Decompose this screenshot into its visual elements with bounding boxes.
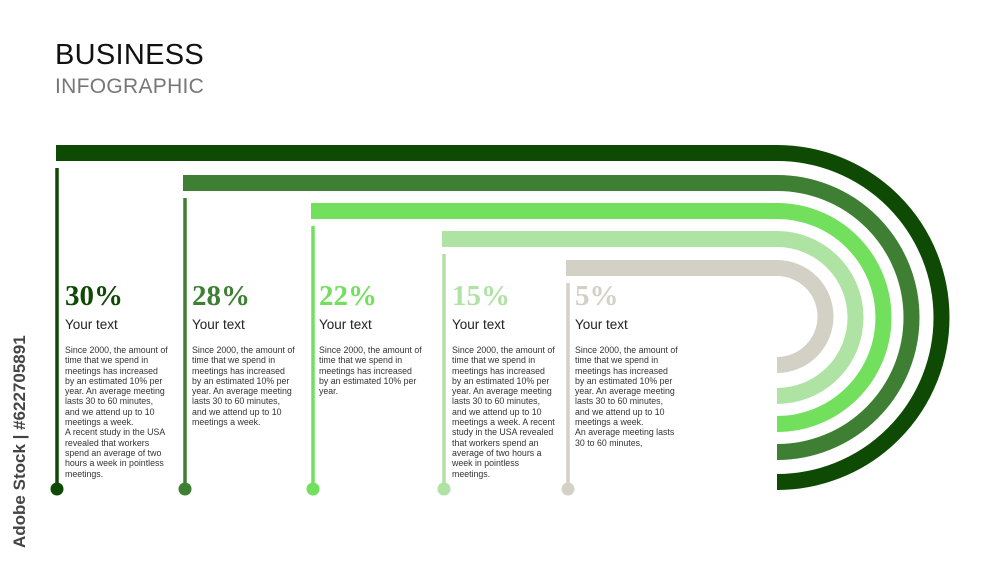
column 5: Your text <box>575 317 628 332</box>
column 2: 28% <box>192 280 250 312</box>
column 2: Since 2000, the amount of time that we spend in meetings has increased by an estimated 10% per year. An average meeting lasts 30 to 60 minutes, and we attend up to 10 meetings a week. <box>192 345 295 427</box>
watermark side text: Adobe Stock | #622705891 <box>10 335 29 548</box>
band 4 <box>442 239 856 396</box>
column 1: Since 2000, the amount of time that we spend in meetings has increased by an estimated 10% per year. An average meeting lasts 30 to 60 minutes, and we attend up to 10 meetings a week. <box>65 345 168 427</box>
band 3 <box>311 211 884 424</box>
band 5 <box>566 268 826 365</box>
column 3: Since 2000, the amount of time that we spend in meetings has increased by an estimated 10% per year. <box>319 345 422 396</box>
column 2: Your text <box>192 317 245 332</box>
column 3 <box>319 280 422 396</box>
title: INFOGRAPHIC <box>55 75 204 98</box>
column 1 <box>65 280 168 479</box>
column 5 <box>575 280 678 448</box>
column 4: 15% <box>452 280 510 312</box>
title <box>55 39 204 98</box>
column 5: 5% <box>575 280 618 312</box>
column 5: An average meeting lasts 30 to 60 minutes, <box>575 427 674 448</box>
column 1: Your text <box>65 317 118 332</box>
band 1 <box>56 153 942 482</box>
column 1: 30% <box>65 280 123 312</box>
column 3: 22% <box>319 280 377 312</box>
column 4: Since 2000, the amount of time that we spend in meetings has increased by an estimated 10% per year. An average meeting lasts 30 to 60 minutes, and we attend up to 10 meetings a week. A recent study in the USA revealed that workers spend an average of two hours a week in pointless meetings. <box>452 345 555 479</box>
column 3: Your text <box>319 317 372 332</box>
column 4: Your text <box>452 317 505 332</box>
pointer lines <box>50 168 574 496</box>
column 1: A recent study in the USA revealed that workers spend an average of two hours a week in pointless meetings. <box>65 427 165 479</box>
title: BUSINESS <box>55 39 204 71</box>
column 5: Since 2000, the amount of time that we spend in meetings has increased by an estimated 10% per year. An average meeting lasts 30 to 60 minutes, and we attend up to 10 meetings a week. <box>575 345 678 427</box>
column 4 <box>452 280 555 479</box>
band 2 <box>183 183 912 452</box>
column 2 <box>192 280 295 427</box>
